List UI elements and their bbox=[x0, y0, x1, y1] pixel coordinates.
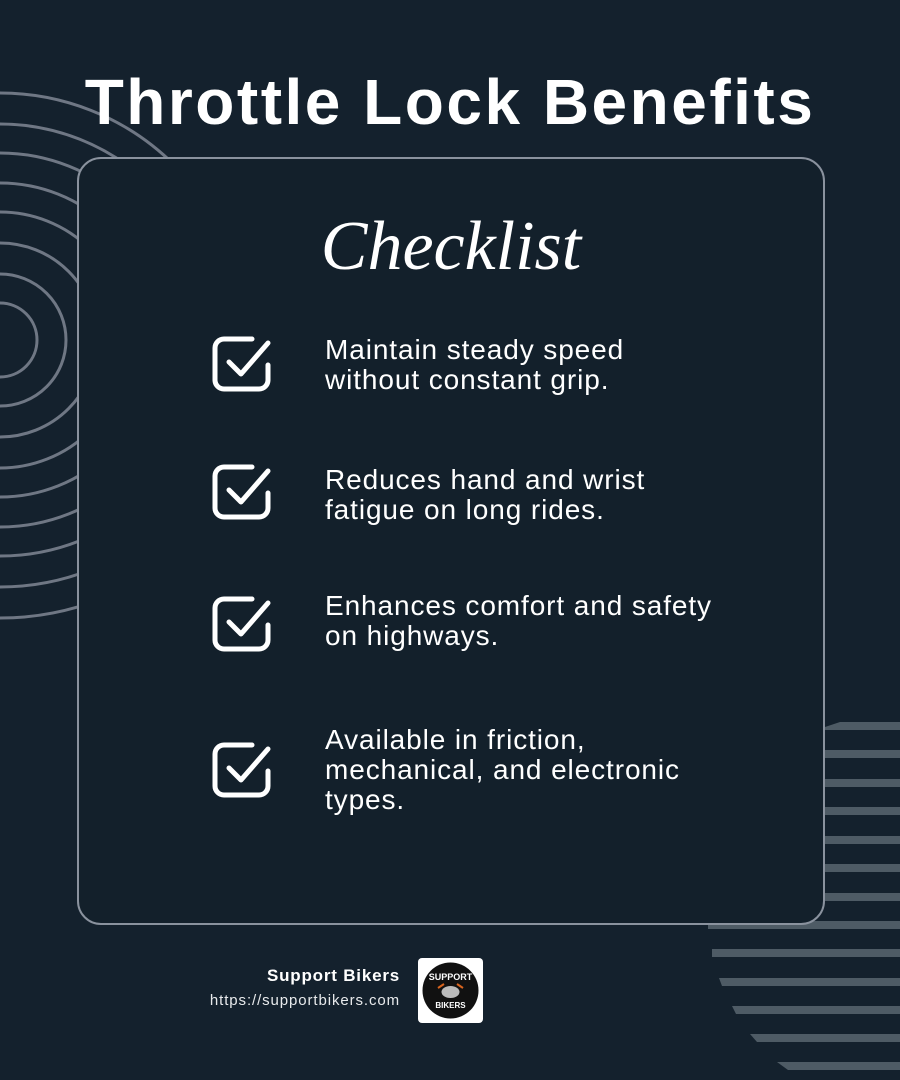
icon: checkbox bbox=[212, 596, 270, 652]
icon: checkbox bbox=[212, 742, 270, 798]
item 4: mechanical, and electronic bbox=[325, 754, 680, 785]
text: Available in friction, bbox=[325, 724, 586, 755]
icon: logo bbox=[418, 958, 483, 1023]
item 1: without constant grip. bbox=[325, 364, 609, 395]
item 3: Enhances comfort and safety bbox=[325, 590, 712, 621]
item 1 bbox=[212, 334, 624, 395]
heading: Checklist: Checklist bbox=[321, 208, 581, 285]
item 4 bbox=[212, 724, 680, 815]
icon: checkbox bbox=[212, 464, 270, 520]
panel: checklist card bbox=[77, 157, 825, 925]
item 2: Reduces hand and wrist bbox=[325, 464, 645, 495]
icon: logo: BIKERS bbox=[435, 1001, 466, 1010]
item 3 bbox=[212, 590, 712, 652]
item 2 bbox=[212, 464, 645, 525]
icon: checkbox bbox=[212, 336, 270, 392]
item 1: Maintain steady speed bbox=[325, 334, 624, 365]
icon: logo: SUPPORT bbox=[429, 972, 473, 982]
footer text bbox=[210, 966, 400, 1009]
footer text: https://supportbikers.com bbox=[210, 992, 400, 1009]
item 4: types. bbox=[325, 784, 405, 815]
footer text: Support Bikers bbox=[267, 966, 400, 985]
item 3: on highways. bbox=[325, 620, 499, 651]
item 2: fatigue on long rides. bbox=[325, 494, 605, 525]
title: Throttle Lock Benefits bbox=[85, 66, 815, 138]
